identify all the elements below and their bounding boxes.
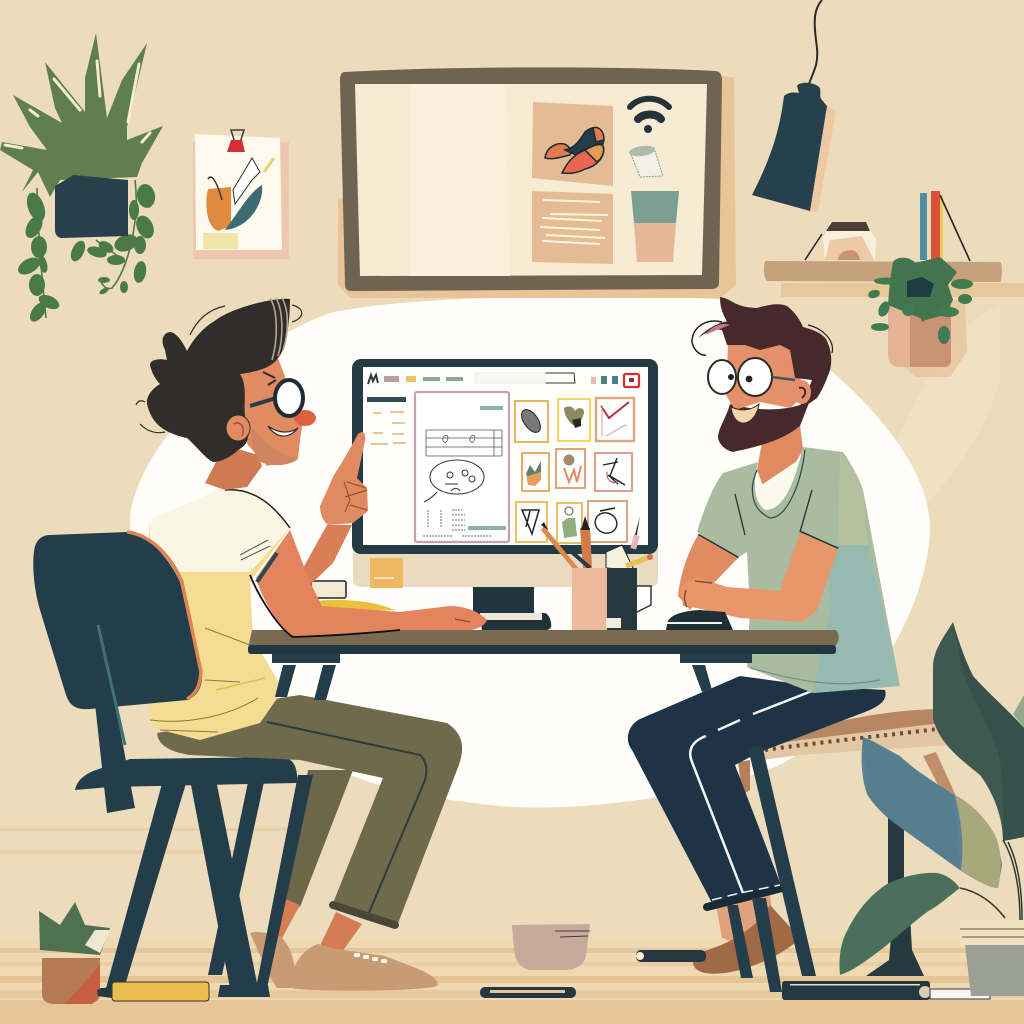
- left person foot and shoe: [292, 912, 438, 991]
- pot rim: [960, 920, 1024, 946]
- striped cup icon: [628, 144, 663, 177]
- cuff: [707, 888, 782, 907]
- green leaf: [839, 873, 960, 975]
- beard: [718, 395, 812, 452]
- wifi icon: [630, 99, 669, 133]
- mouth: [268, 426, 298, 436]
- monitor chin: [353, 550, 658, 587]
- eye and brow: [263, 372, 276, 385]
- dark pen on floor right: [636, 950, 706, 962]
- frame outer: [340, 67, 722, 291]
- sketch card 1: [515, 401, 548, 442]
- left person neck and head: [136, 298, 316, 490]
- ear: [226, 415, 250, 441]
- keyboard: [480, 613, 551, 631]
- pencils: [541, 526, 580, 570]
- desk underside: [272, 648, 340, 663]
- vine stems: [37, 180, 136, 318]
- sketch card 7: [516, 502, 547, 542]
- shelf shadow: [781, 283, 1024, 297]
- raised forearm: [300, 525, 352, 590]
- ear: [793, 380, 811, 404]
- face: [726, 340, 805, 410]
- shoe: [693, 905, 800, 974]
- pot body: [965, 945, 1024, 996]
- left chair legs: [75, 757, 313, 997]
- nose: [294, 410, 316, 426]
- far arm: [678, 535, 738, 610]
- top toolbar: [368, 373, 639, 387]
- pinned note: [193, 130, 289, 259]
- smile: [731, 404, 759, 423]
- shirt: [697, 447, 900, 693]
- books: [920, 193, 927, 260]
- pendant lamp: [752, 0, 836, 212]
- wall planter: [55, 175, 128, 238]
- binder clip: [231, 130, 244, 143]
- pink cup: [572, 568, 607, 630]
- tan card with lines: [532, 191, 613, 264]
- ankle: [716, 892, 772, 942]
- sketch card 2: [558, 399, 590, 441]
- desk back legs: [275, 665, 712, 700]
- document text lines: [423, 510, 492, 536]
- pointing hand: [320, 432, 368, 525]
- spiky leaves: [0, 33, 163, 197]
- hair: [147, 299, 290, 462]
- near arm: [680, 532, 838, 622]
- floor pot plant left: [39, 902, 110, 1004]
- frame shadow: [338, 72, 736, 298]
- shelf plank: [764, 261, 1002, 282]
- mouse and notebook: [666, 610, 733, 630]
- pants cuff: [333, 905, 395, 925]
- large potted plant: [839, 622, 1024, 996]
- sketch card 5: [556, 449, 585, 488]
- blue leaf: [862, 737, 1002, 888]
- left person shirt: [140, 488, 290, 740]
- lamp shadow: [808, 106, 836, 212]
- long pen on floor: [782, 981, 990, 1000]
- stool: [738, 709, 956, 976]
- pinkish bowl on floor: [512, 924, 590, 970]
- desk: [248, 630, 839, 992]
- shelf planter: [867, 257, 973, 377]
- two-tone tile: [631, 191, 679, 223]
- sad face bubble: [424, 460, 484, 502]
- hair: [698, 297, 831, 410]
- left chair back: [33, 532, 202, 813]
- right person: [628, 297, 900, 974]
- monitor: [352, 359, 658, 614]
- left person pants: [157, 695, 462, 926]
- hair stripes: [270, 298, 287, 360]
- left person book and forearm: [240, 432, 487, 637]
- vine leaves: [15, 183, 157, 324]
- plant stems: [960, 840, 1022, 920]
- monitor bezel: [352, 359, 658, 554]
- chair support: [88, 625, 135, 813]
- glasses: [250, 398, 276, 406]
- monitor screen: [363, 367, 648, 545]
- shelf decor: [823, 222, 876, 260]
- dark pen on floor centre: [480, 987, 576, 998]
- hanging plant: [0, 33, 163, 324]
- pants: [628, 676, 886, 903]
- wall shelf: [764, 191, 1024, 297]
- wall frame: [338, 67, 736, 298]
- lamp shade: [752, 83, 827, 211]
- planter foliage: [888, 257, 957, 320]
- tan card with butterfly: [532, 102, 613, 186]
- desk front leg: [748, 745, 816, 976]
- seat: [75, 757, 297, 790]
- white spotlight ellipse: [130, 296, 930, 807]
- sketch card 8: [557, 503, 582, 543]
- document panel: [415, 392, 509, 542]
- sidebar: [367, 397, 406, 444]
- sketch card 9: [588, 501, 627, 542]
- yellow marker on floor: [97, 982, 209, 1001]
- book: [311, 581, 346, 598]
- mug handle: [637, 586, 651, 612]
- left person far leg: [250, 770, 353, 988]
- sketch card 6: [595, 453, 632, 491]
- note sketch: [206, 187, 231, 231]
- sketch card 4: [522, 453, 549, 491]
- sleeve cuff: [257, 553, 277, 582]
- neck: [757, 425, 803, 505]
- desk top: [248, 630, 839, 648]
- resting arm: [256, 530, 487, 637]
- monitor stand: [473, 586, 534, 614]
- frame canvas: [355, 84, 707, 276]
- sketch card 3: [596, 398, 634, 441]
- dark mug: [607, 568, 637, 630]
- pen cup and mug: [541, 516, 653, 630]
- glasses: [708, 360, 736, 394]
- floor: [0, 828, 1024, 1024]
